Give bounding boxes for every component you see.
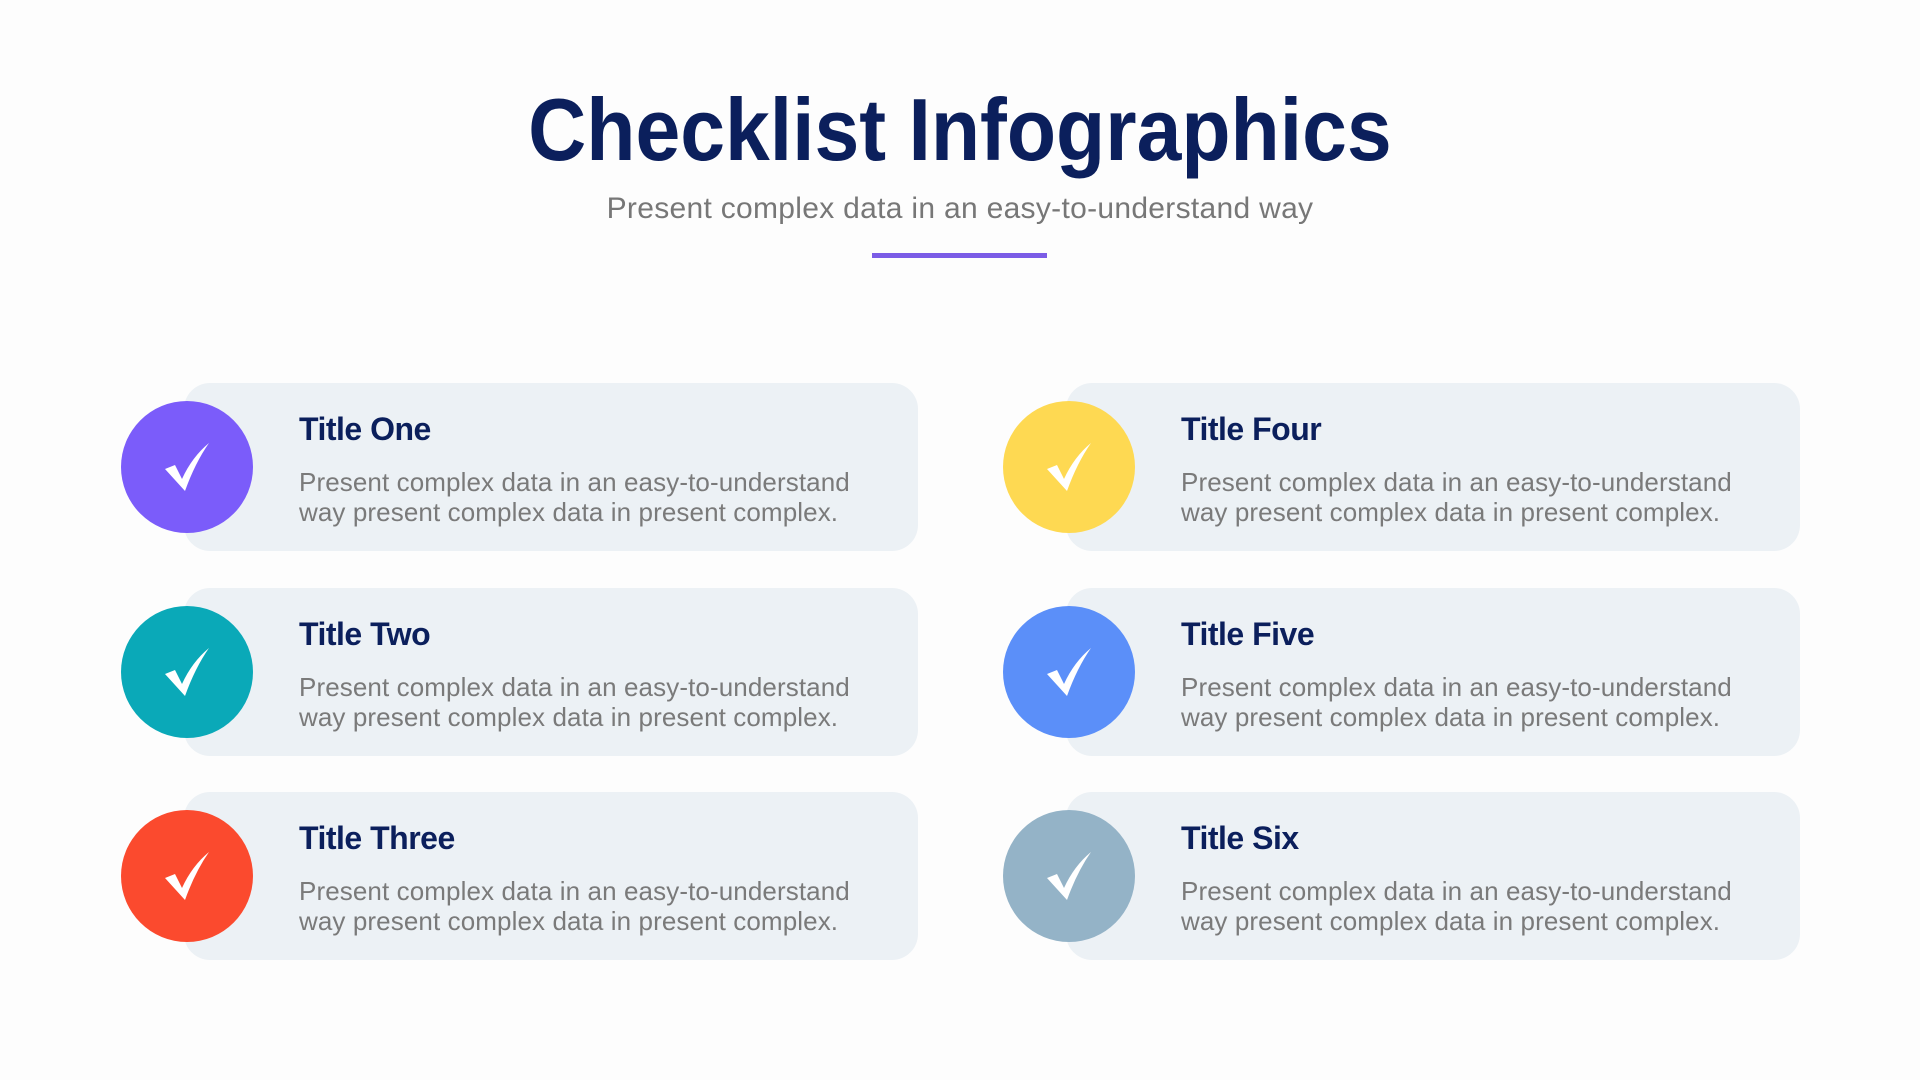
item: Title Three bbox=[121, 792, 918, 960]
icon: check circle purple bbox=[121, 401, 253, 533]
item: Title Six bbox=[1003, 792, 1800, 960]
text bbox=[1181, 467, 1732, 527]
icon: check circle blue bbox=[1003, 606, 1135, 738]
heading: Title Six bbox=[1181, 820, 1299, 856]
text: Present complex data in an easy-to-understand bbox=[1181, 467, 1732, 497]
heading: Title Three bbox=[299, 820, 455, 856]
item: Title Two bbox=[121, 588, 918, 756]
text: way present complex data in present complex. bbox=[299, 702, 838, 732]
heading: Title Five bbox=[1181, 616, 1314, 652]
text: way present complex data in present complex. bbox=[299, 497, 838, 527]
card background bbox=[1066, 588, 1800, 756]
card background bbox=[1066, 792, 1800, 960]
item: Title One bbox=[121, 383, 918, 551]
text: Present complex data in an easy-to-understand bbox=[299, 672, 850, 702]
text: way present complex data in present complex. bbox=[299, 906, 838, 936]
title: Checklist Infographics bbox=[528, 80, 1392, 179]
card background bbox=[1066, 383, 1800, 551]
text: Present complex data in an easy-to-understand bbox=[299, 467, 850, 497]
text bbox=[299, 672, 850, 732]
heading: Title One bbox=[299, 411, 431, 447]
text: Present complex data in an easy-to-understand bbox=[1181, 876, 1732, 906]
text: Present complex data in an easy-to-understand bbox=[299, 876, 850, 906]
text: way present complex data in present complex. bbox=[1181, 906, 1720, 936]
text bbox=[299, 876, 850, 936]
icon: check circle grey-blue bbox=[1003, 810, 1135, 942]
text: way present complex data in present complex. bbox=[1181, 702, 1720, 732]
item: Title Five bbox=[1003, 588, 1800, 756]
icon: check circle teal bbox=[121, 606, 253, 738]
text: Present complex data in an easy-to-understand bbox=[1181, 672, 1732, 702]
heading: Title Four bbox=[1181, 411, 1321, 447]
text: way present complex data in present complex. bbox=[1181, 497, 1720, 527]
underline accent bbox=[872, 253, 1047, 258]
card background bbox=[184, 792, 918, 960]
text bbox=[299, 467, 850, 527]
heading: Title Two bbox=[299, 616, 430, 652]
text bbox=[1181, 876, 1732, 936]
icon: check circle yellow bbox=[1003, 401, 1135, 533]
item: Title Four bbox=[1003, 383, 1800, 551]
text bbox=[1181, 672, 1732, 732]
icon: check circle red bbox=[121, 810, 253, 942]
card background bbox=[184, 383, 918, 551]
card background bbox=[184, 588, 918, 756]
subtitle: Present complex data in an easy-to-understand way bbox=[607, 192, 1313, 225]
